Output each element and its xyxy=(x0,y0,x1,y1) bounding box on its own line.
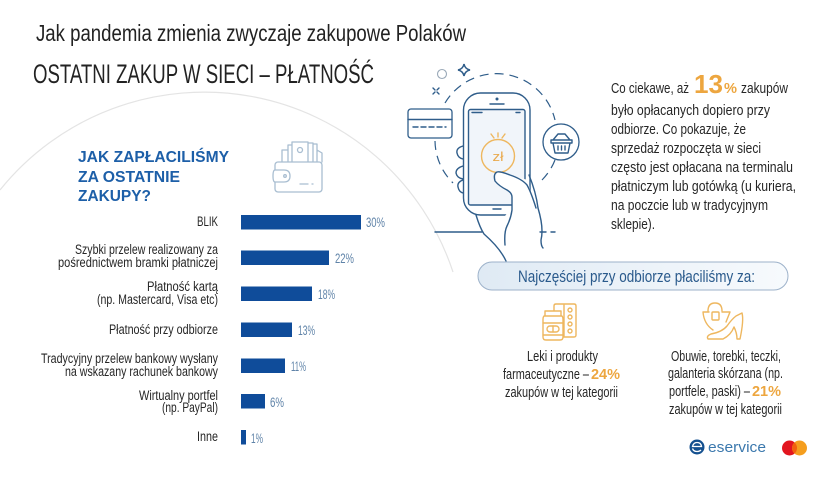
bar: szybki przelew: 22% xyxy=(335,251,354,266)
bar: BLIK: 30% xyxy=(366,215,385,230)
text block: 13% callout: Co ciekawe, aż xyxy=(611,81,689,97)
text block: 13% callout: odbiorze. Co pokazuje, że xyxy=(611,122,746,138)
bar: wirtualny portfel xyxy=(139,388,284,415)
category text: 21% xyxy=(752,383,781,400)
bar: płatność kartą: Płatność kartą xyxy=(147,279,218,294)
category text xyxy=(503,349,620,401)
bar: BLIK xyxy=(197,214,385,230)
category text: zakupów w tej kategorii xyxy=(505,385,618,401)
text block: 13% callout: sklepie). xyxy=(611,217,655,233)
category text xyxy=(668,349,783,418)
bar: BLIK: BLIK xyxy=(197,214,218,229)
hand fingers behind phone xyxy=(456,146,463,193)
panel: pharmacy category xyxy=(503,304,620,401)
category text: zakupów w tej kategorii xyxy=(669,402,782,418)
logo: Mastercard xyxy=(782,440,807,456)
bar: tradycyjny przelew xyxy=(41,351,306,379)
bar: płatność kartą: (np. Mastercard, Visa etc) xyxy=(97,292,218,307)
icon: handbag and high heel xyxy=(703,303,743,339)
text block: 13% callout: było opłacanych dopiero przy xyxy=(611,103,771,119)
subtitle: OSTATNI ZAKUP W SIECI – PŁATNOŚĆ xyxy=(33,57,374,89)
icon: phone payment illustration xyxy=(408,64,579,261)
hand xyxy=(490,172,543,261)
bar: szybki przelew: Szybki przelew realizowany za xyxy=(75,242,218,257)
text block: 13% callout: 13 xyxy=(694,69,723,99)
text block: 13% callout: sprzedaż rozpoczęta w sieci xyxy=(611,141,761,157)
category text: 24% xyxy=(591,366,620,383)
bar: inne xyxy=(197,429,263,446)
panel: shoes and bags category xyxy=(668,303,783,418)
bar: płatność przy odbiorze: 13% xyxy=(298,323,315,338)
bar: inne: Inne xyxy=(197,429,218,444)
panel: payment chart xyxy=(41,142,385,446)
bar: wirtualny portfel: 6% xyxy=(270,395,284,410)
chart heading xyxy=(78,148,230,205)
icon: shopping basket xyxy=(543,124,579,160)
text block: 13% callout xyxy=(611,69,796,233)
text block: 13% callout: % xyxy=(724,80,737,97)
bar: płatność przy odbiorze xyxy=(109,322,315,338)
icon: coin with currency xyxy=(482,133,514,172)
bar: szybki przelew xyxy=(58,242,354,270)
chart heading: JAK ZAPŁACILIŚMY xyxy=(78,148,230,166)
heading pill: payment on delivery: Najczęściej przy odbiorze płaciliśmy za: xyxy=(518,267,755,286)
bar: szybki przelew: pośrednictwem bramki płatniczej xyxy=(58,255,218,270)
bar chart xyxy=(41,214,385,446)
bar: wirtualny portfel: (np. PayPal) xyxy=(162,400,218,415)
icon: coin with currency: zł xyxy=(492,149,504,164)
text block: 13% callout: zakupów xyxy=(741,81,788,97)
icon: wallet xyxy=(273,142,322,192)
icon: credit card xyxy=(408,109,452,138)
bar: płatność przy odbiorze: Płatność przy odbiorze xyxy=(109,322,218,337)
bar: tradycyjny przelew: Tradycyjny przelew bankowy wysłany xyxy=(41,351,218,366)
text block: 13% callout: często jest opłacana na terminalu xyxy=(611,160,793,176)
bar: tradycyjny przelew: na wskazany rachunek bankowy xyxy=(65,364,218,379)
text block: 13% callout: płatniczym lub gotówką (u kuriera, xyxy=(611,179,796,195)
category text: Obuwie, torebki, teczki, xyxy=(671,349,781,365)
category text: Leki i produkty xyxy=(527,349,599,365)
logo: eservice: eservice xyxy=(708,439,766,456)
category text: portfele, paski) – xyxy=(669,384,751,400)
category text: farmaceutyczne – xyxy=(503,367,590,383)
chart heading: ZAKUPY? xyxy=(78,188,151,205)
bar: wirtualny portfel: Wirtualny portfel xyxy=(139,388,218,403)
bar: płatność kartą xyxy=(97,279,335,307)
phone body xyxy=(464,93,530,215)
title: Jak pandemia zmienia zwyczaje zakupowe Polaków xyxy=(36,20,466,46)
bar: tradycyjny przelew: 11% xyxy=(291,359,306,374)
icon: medicine jar and pills xyxy=(543,304,576,340)
heading pill: payment on delivery xyxy=(478,262,788,290)
bar: płatność kartą: 18% xyxy=(318,287,335,302)
category text: galanteria skórzana (np. xyxy=(668,366,783,382)
chart heading: ZA OSTATNIE xyxy=(78,169,180,186)
text block: 13% callout: na poczcie lub w tradycyjnym xyxy=(611,198,768,214)
bar: inne: 1% xyxy=(251,431,263,446)
